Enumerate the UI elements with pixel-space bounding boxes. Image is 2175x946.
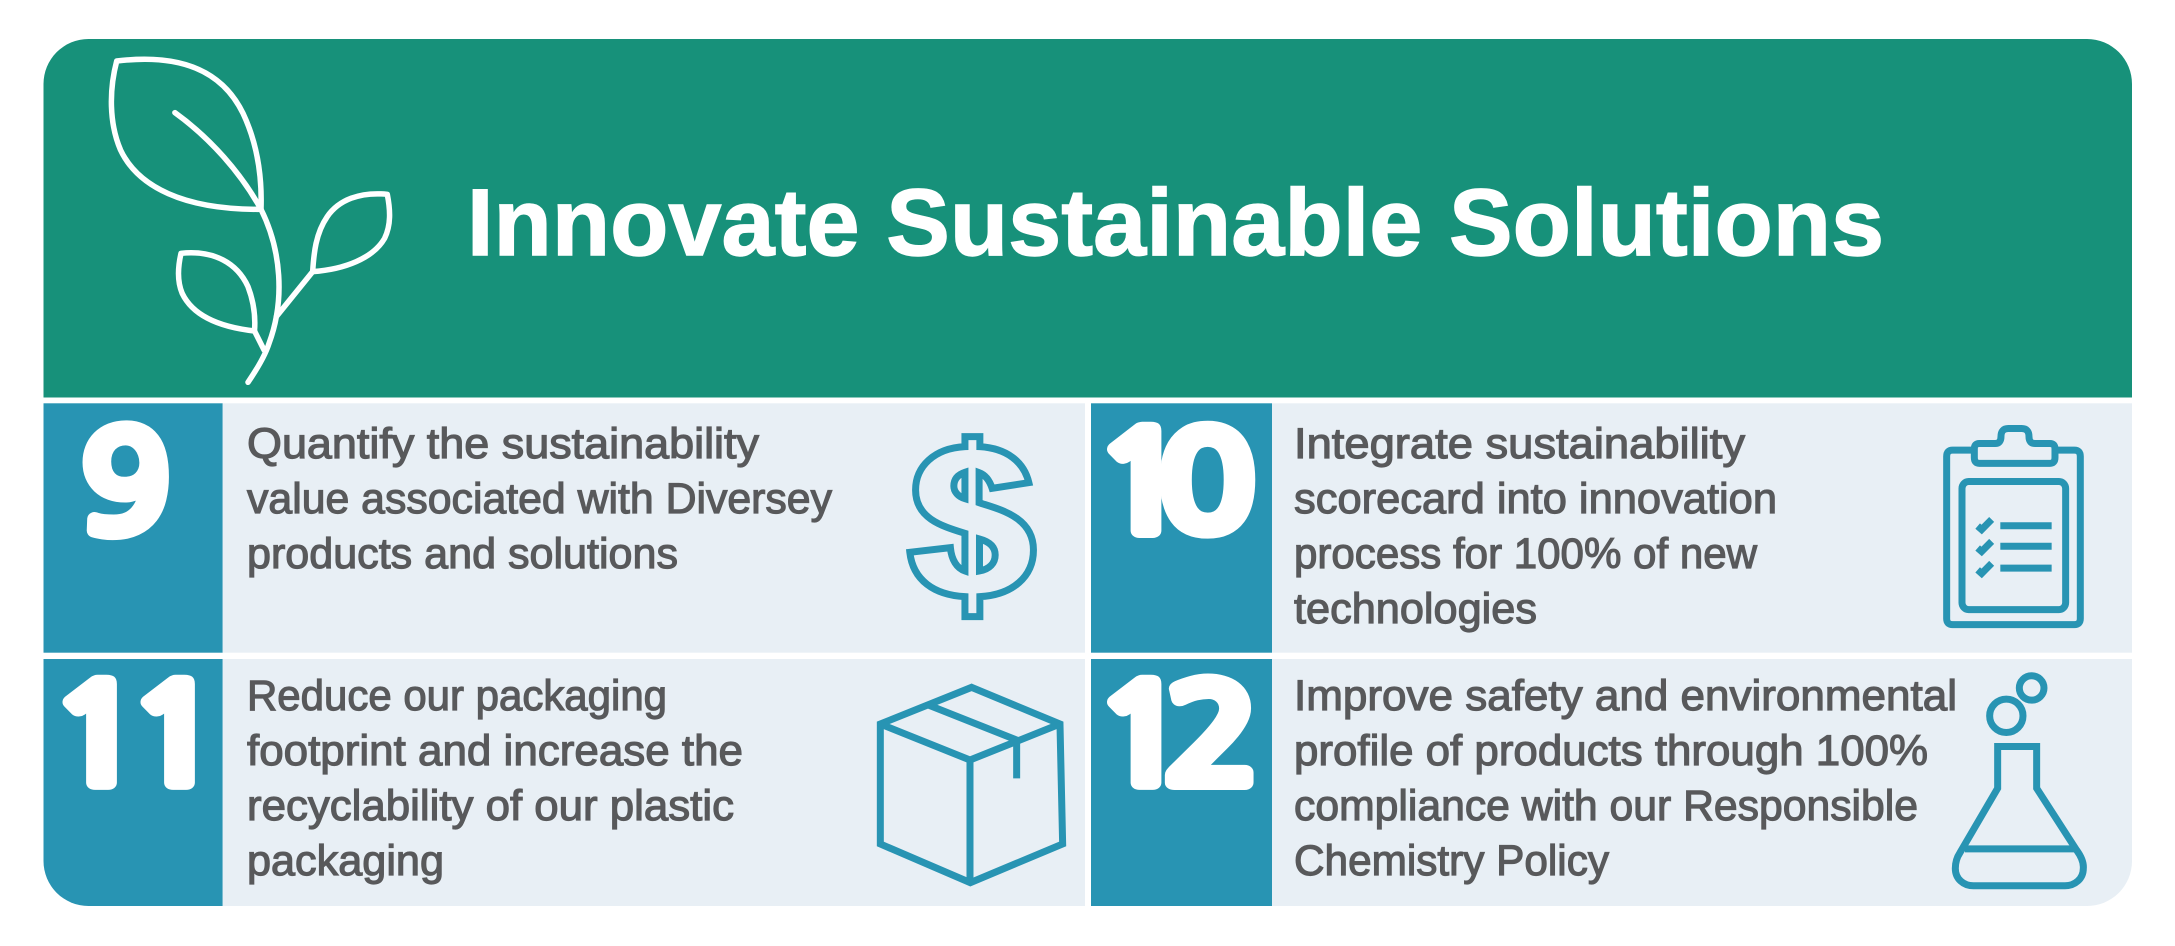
- text: goal 12: compliance with our Responsible: [1294, 782, 1918, 830]
- text: goal 10: process for 100% of new: [1294, 530, 1758, 578]
- icon: flask with bubbles: [1955, 676, 2083, 886]
- text: goal 12: [1294, 672, 1957, 885]
- icon: clipboard checklist: [1947, 429, 2080, 625]
- text: goal 11: footprint and increase the: [247, 727, 743, 775]
- text: goal 10: technologies: [1294, 585, 1537, 633]
- panel: goal 11: [44, 659, 1085, 906]
- text: goal 10: scorecard into innovation: [1294, 475, 1777, 523]
- icon: cardboard box: [880, 687, 1063, 883]
- panel: goal 12: [1091, 659, 2132, 906]
- text: goal 10: Integrate sustainability: [1294, 420, 1746, 468]
- panel: goal 10: [1091, 403, 2132, 653]
- text: goal 11: packaging: [247, 837, 444, 885]
- text: goal 11: recyclability of our plastic: [247, 782, 734, 830]
- panel: goal 9: [44, 403, 1085, 653]
- text: goal 12: Chemistry Policy: [1294, 837, 1609, 885]
- text: goal 10: [1294, 420, 1777, 633]
- text: goal 11: Reduce our packaging: [247, 672, 667, 720]
- text: goal 12: Improve safety and environmental: [1294, 672, 1957, 720]
- text: goal 9: products and solutions: [247, 530, 678, 578]
- text: goal 11: [247, 672, 743, 885]
- title: Innovate Sustainable Solutions: [467, 170, 1884, 276]
- icon: dollar sign: [910, 437, 1033, 617]
- text: goal 9: Quantify the sustainability: [247, 420, 760, 468]
- number 12: 12: [1092, 669, 1262, 805]
- icon: leafy sprig: [111, 59, 390, 382]
- text: goal 12: profile of products through 100%: [1294, 727, 1928, 775]
- number 10: 10: [1092, 415, 1257, 553]
- number 9: 9: [80, 416, 171, 554]
- panel: header: [44, 39, 2132, 398]
- text: goal 9: value associated with Diversey: [247, 475, 832, 523]
- text: goal 9: [247, 420, 832, 578]
- number 11: 11: [48, 669, 226, 805]
